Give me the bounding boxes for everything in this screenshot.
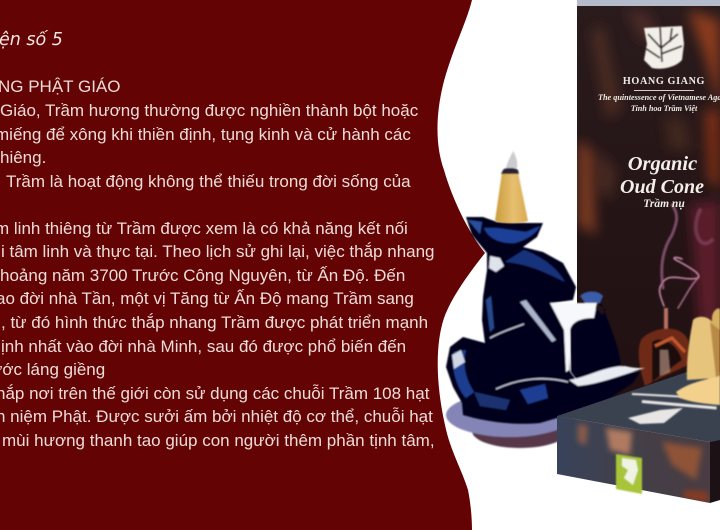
paragraph 3 line 2: i tâm linh và thực tại. Theo lịch sử ghi lại, việc thắp nhang: [1, 242, 435, 261]
incense cone: [495, 151, 528, 223]
paragraph 3 line 4: ao đời nhà Tần, một vị Tăng từ Ấn Độ mang Trầm sang: [0, 289, 414, 308]
paragraph 3 line 6: ịnh nhất vào đời nhà Minh, sau đó được phổ biến đến: [1, 337, 406, 356]
paragraph 4 line 2: n niệm Phật. Được sưởi ấm bởi nhiệt độ cơ thể, chuỗi hạt: [0, 407, 433, 426]
photo: small product box: [557, 308, 720, 503]
tagline vietnamese: Tinh hoa Trầm Việt: [631, 104, 698, 113]
section heading: NG PHẬT GIÁO: [0, 77, 120, 96]
paragraph 4 line 3: mùi hương thanh tao giúp con người thêm phần tịnh tâm,: [2, 431, 435, 450]
incense cones on stand: [676, 308, 720, 405]
paragraph 1 line 2: miếng để xông khi thiền định, tụng kinh và cử hành các: [0, 125, 411, 144]
plate: [446, 393, 574, 448]
product subtitle: Trầm nụ: [643, 197, 685, 210]
photo: backflow incense burner: [446, 151, 645, 448]
photo: small burning cone behind: [639, 308, 689, 386]
text block: body copy: [0, 30, 435, 450]
ceramic body: [446, 217, 645, 424]
heading: slide title: ện số 5: [0, 30, 63, 50]
brand name: HOANG GIANG: [623, 76, 705, 87]
paragraph 3 line 3: hoảng năm 3700 Trước Công Nguyên, từ Ấn Độ. Đến: [0, 266, 405, 285]
product title line 2: Oud Cone: [620, 176, 704, 198]
photo: large product box: [577, 0, 720, 406]
paragraph 4: hắp nơi trên thế giới còn sử dụng các chuỗi Trầm 108 hạt: [0, 384, 429, 403]
panel: maroon wavy background: [0, 0, 485, 530]
box lettering: [628, 393, 717, 424]
product title: Organic: [628, 153, 697, 175]
paragraph 3: m linh thiêng từ Trầm được xem là có khả năng kết nối: [0, 219, 408, 238]
logo: tree emblem: [644, 26, 684, 69]
paragraph 1 line 3: hiêng.: [0, 148, 46, 167]
paragraph 2: Trầm là hoạt động không thể thiếu trong đời sống của: [6, 172, 411, 191]
paragraph 1: Giáo, Trầm hương thường được nghiền thành bột hoặc: [0, 101, 418, 120]
rule: [634, 90, 694, 91]
paragraph 3 line 5: , từ đó hình thức thắp nhang Trầm được phát triển mạnh: [1, 313, 428, 332]
green label: [616, 454, 642, 494]
